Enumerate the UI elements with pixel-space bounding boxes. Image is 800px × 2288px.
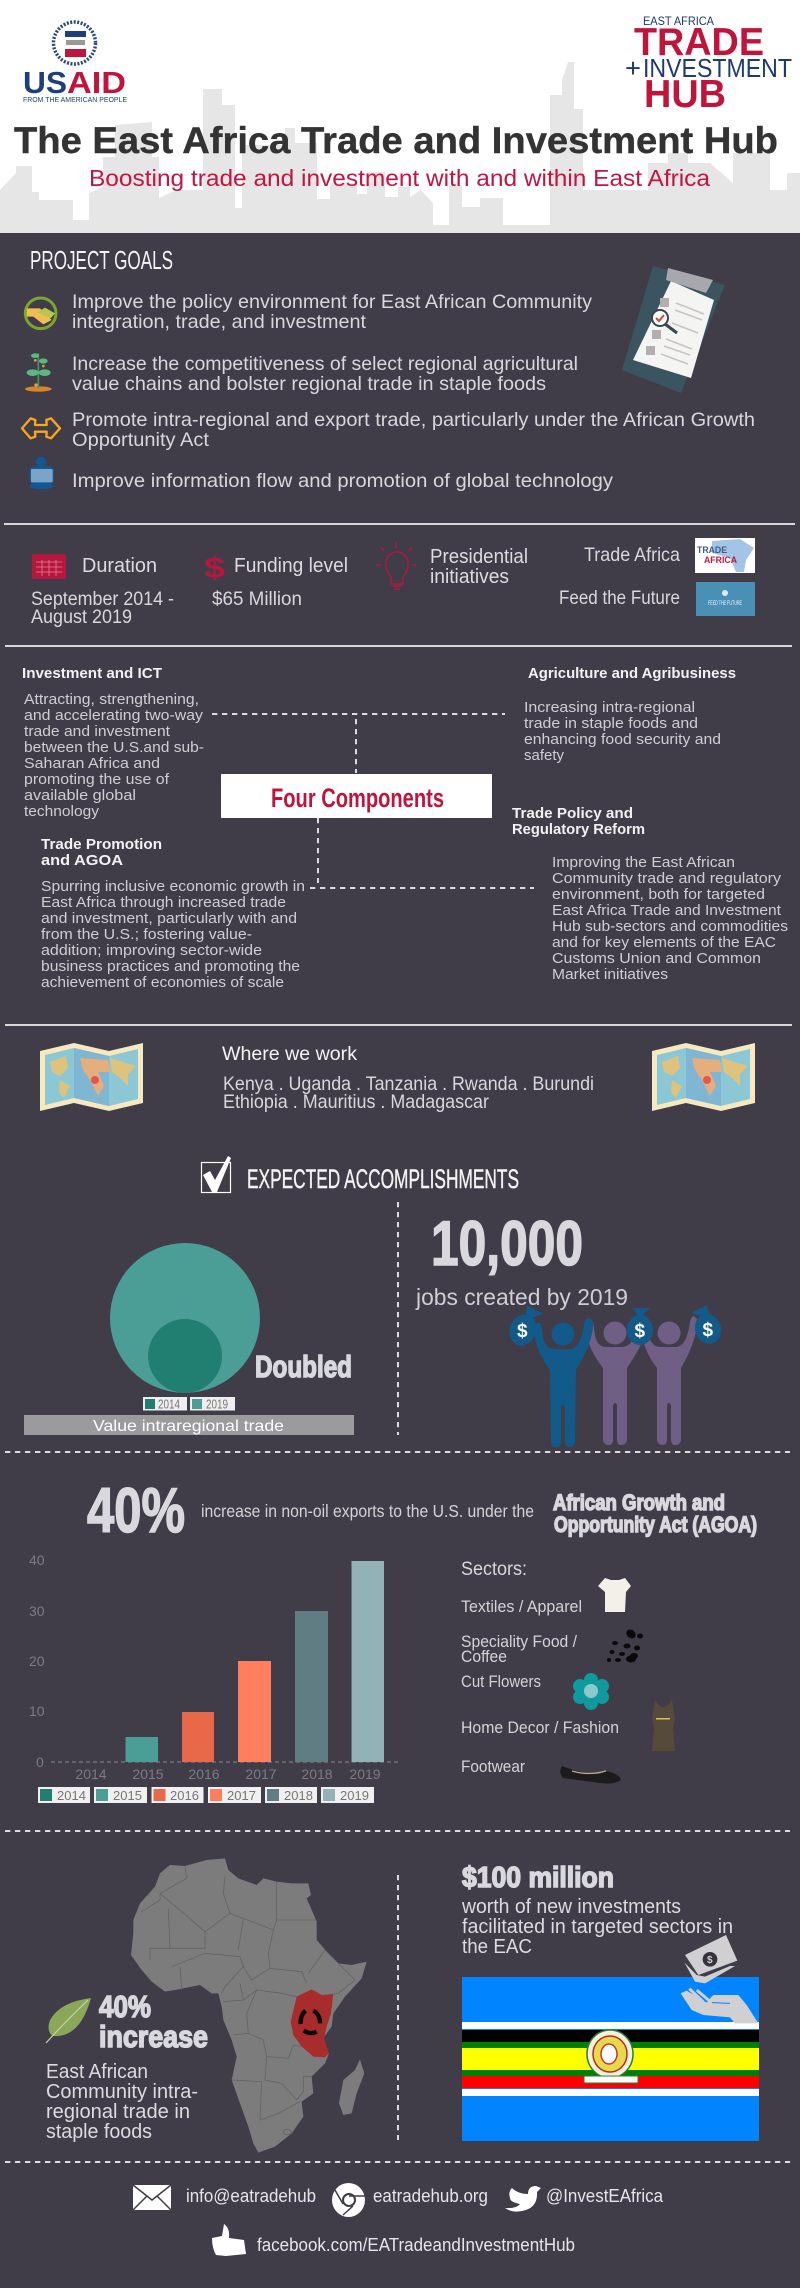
stat: 40% increase staple foods: regional trade in	[46, 2101, 190, 2123]
goal 1 text: Improve the policy environment for East African Community	[72, 291, 592, 313]
panel: duration: September 2014 -	[31, 588, 174, 610]
panel: sectors: Home Decor / Fashion	[461, 1719, 619, 1737]
icon: checkbox	[202, 1156, 231, 1192]
y axis labels: 0	[36, 1754, 44, 1770]
component: agriculture and agribusiness: Agriculture and Agribusiness	[528, 665, 736, 682]
goal 2 text: Increase the competitiveness of select regional agricultural	[72, 353, 578, 375]
money bag left: $	[517, 1321, 528, 1342]
x axis labels: 2016	[188, 1766, 220, 1782]
y axis labels: 40	[29, 1552, 45, 1568]
icon: shoe	[560, 1766, 621, 1784]
panel: duration: Duration	[82, 555, 157, 577]
icon: plant	[25, 353, 52, 392]
panel: sectors: Sectors:	[461, 1558, 527, 1580]
y axis labels: 20	[29, 1653, 45, 1669]
logo: trade africa: TRADE	[697, 545, 727, 555]
logo: USAID: AID	[67, 65, 126, 100]
legend: 2018	[284, 1788, 313, 1803]
legend: 2019	[206, 1396, 228, 1412]
panel: funding level	[204, 552, 348, 610]
component: trade policy and regulatory reform: Regulatory Reform	[512, 821, 645, 838]
circle: 2019	[110, 1243, 260, 1393]
y axis labels	[29, 1552, 45, 1770]
icon: thumbs up	[212, 2224, 246, 2256]
icon: people with money bags	[505, 1305, 725, 1447]
component: trade policy and regulatory reform: Improving the East African	[552, 854, 735, 871]
footer contacts	[133, 2183, 664, 2256]
stat: $100 million: the EAC	[462, 1936, 532, 1958]
legend: 2014	[158, 1396, 180, 1412]
footer contacts: info@eatradehub	[186, 2186, 316, 2206]
footer contacts: @InvestEAfrica	[546, 2186, 664, 2206]
footer contacts: facebook.com/EATradeandInvestmentHub	[257, 2235, 575, 2255]
caption bar	[24, 1415, 354, 1435]
logo: feed the future: FEED THE FUTURE	[708, 601, 742, 607]
logo: feed the future	[696, 582, 755, 616]
icon: map left	[40, 1043, 143, 1111]
component: investment and ICT: and accelerating two-way	[24, 707, 204, 724]
x axis labels: 2014	[75, 1766, 107, 1782]
logo: East Africa Trade + Investment Hub	[625, 14, 792, 116]
panel: sectors: Speciality Food /	[461, 1633, 577, 1651]
component: trade promotion and AGOA: Spurring inclusive economic growth in	[41, 878, 305, 895]
goal 3 text: Promote intra-regional and export trade, particularly under the African Growth	[72, 409, 755, 431]
circle: 2014	[148, 1319, 222, 1393]
panel: trade africa	[584, 538, 755, 573]
icon: leaf	[46, 1998, 91, 2043]
component: trade policy and regulatory reform: Customs Union and Common	[552, 950, 761, 967]
stat: 40% non-oil exports: African Growth and	[553, 1490, 725, 1515]
icon: dollar sign: $	[204, 552, 225, 585]
panel: duration	[31, 554, 174, 628]
panel: trade africa: Trade Africa	[584, 544, 680, 566]
heading: expected accomplishments	[202, 1156, 519, 1194]
goal 4 text: Improve information flow and promotion of global technology	[72, 470, 613, 492]
legend: 2015	[113, 1788, 142, 1803]
component: trade policy and regulatory reform	[512, 805, 788, 983]
component: investment and ICT: Saharan Africa and	[24, 755, 160, 772]
stat: $100 million	[461, 1862, 733, 1958]
footer contacts: eatradehub.org	[373, 2186, 488, 2206]
component: investment and ICT: trade and investment	[24, 723, 171, 740]
stat: 40% increase staple foods: staple foods	[46, 2121, 152, 2143]
money bag right	[691, 1305, 725, 1348]
goal 2 text: value chains and bolster regional trade in staple foods	[72, 373, 546, 395]
icon: light bulb	[376, 542, 416, 589]
logo: trade africa	[695, 538, 755, 573]
subtitle: Boosting trade and investment with and within East Africa	[89, 165, 710, 191]
money bag center	[627, 1308, 653, 1345]
logo: USAID: FROM THE AMERICAN PEOPLE	[23, 97, 127, 104]
flag: East African Community	[462, 1977, 759, 2141]
panel: four components	[22, 665, 788, 991]
bars	[126, 1561, 384, 1762]
icon: coffee beans	[607, 1628, 643, 1662]
x axis labels: 2017	[245, 1766, 277, 1782]
component: trade promotion and AGOA: and investment, particularly with and	[41, 910, 297, 927]
stat: $100 million: worth of new investments	[461, 1896, 681, 1918]
icon: handshake	[25, 298, 56, 329]
legend: 2019	[340, 1788, 369, 1803]
component: trade policy and regulatory reform: Hub sub-sectors and commodities	[552, 918, 788, 935]
panel: project goals	[22, 245, 755, 492]
stat: 40% increase staple foods: 40%	[99, 1989, 151, 2024]
map: Africa with East African Community highlighted	[131, 1858, 367, 2153]
component: trade policy and regulatory reform: Trade Policy and	[512, 805, 633, 822]
person blue	[535, 1318, 593, 1447]
legend	[38, 1787, 374, 1803]
country list	[223, 1073, 594, 1113]
component: trade policy and regulatory reform: Market initiatives	[552, 966, 668, 983]
goal 3 text: Opportunity Act	[72, 429, 210, 451]
panel: funding level: Funding level	[234, 555, 348, 577]
legend: 2017	[227, 1788, 256, 1803]
component: trade promotion and AGOA: achievement of economies of scale	[41, 974, 284, 991]
component: investment and ICT: between the U.S.and sub-	[24, 739, 204, 756]
panel: sectors: Textiles / Apparel	[461, 1598, 582, 1616]
center box: four components	[221, 774, 492, 818]
stat: 10,000 jobs: jobs created by 2019	[415, 1284, 628, 1310]
money bag center: $	[634, 1321, 646, 1342]
panel: presidential initiatives	[376, 542, 528, 589]
stat: 40% non-oil exports: Opportunity Act (AGOA)	[554, 1512, 757, 1537]
component: investment and ICT: technology	[24, 803, 100, 820]
component: trade promotion and AGOA: addition; improving sector-wide	[41, 942, 262, 959]
panel: feed the future	[559, 582, 755, 616]
connector lines	[212, 714, 534, 888]
heading: project goals: PROJECT GOALS	[30, 245, 173, 275]
money bag left	[505, 1305, 543, 1349]
component: agriculture and agribusiness: safety	[524, 747, 564, 764]
component: trade policy and regulatory reform: and for key elements of the EAC	[552, 934, 776, 951]
logo: East Africa Trade + Investment Hub: EAST AFRICA	[643, 14, 714, 28]
icon: person with laptop	[29, 457, 54, 489]
component: trade promotion and AGOA: business practices and promoting the	[41, 958, 300, 975]
stat: 10,000 jobs	[415, 1209, 628, 1310]
x axis labels	[75, 1766, 381, 1782]
component: trade promotion and AGOA: from the U.S.; fostering value-	[41, 926, 252, 943]
panel: presidential initiatives: initiatives	[430, 566, 509, 588]
component: investment and ICT: Attracting, strengthening,	[24, 691, 199, 708]
component: trade promotion and AGOA	[41, 836, 305, 991]
icon: envelope	[133, 2185, 171, 2210]
component: agriculture and agribusiness: enhancing food security and	[524, 731, 721, 748]
component: trade promotion and AGOA: East Africa through increased trade	[41, 894, 286, 911]
component: agriculture and agribusiness: Increasing intra-regional	[524, 699, 695, 716]
component: trade promotion and AGOA: and AGOA	[41, 852, 123, 869]
label: doubled: Doubled	[255, 1349, 352, 1384]
icon: browser	[332, 2183, 365, 2217]
stat: 40% increase staple foods: Community intra-	[46, 2081, 198, 2103]
legend: 2016	[170, 1788, 199, 1803]
component: trade policy and regulatory reform: environment, both for targeted	[552, 886, 765, 903]
person purple center	[587, 1320, 642, 1445]
component: investment and ICT	[22, 665, 204, 820]
panel: feed the future: Feed the Future	[559, 587, 680, 609]
goal 2 text	[72, 353, 578, 395]
component: investment and ICT: Investment and ICT	[22, 665, 162, 682]
logo: East Africa Trade + Investment Hub: TRADE	[634, 21, 764, 64]
panel: duration: August 2019	[31, 606, 132, 628]
icon: trade arrows	[22, 418, 60, 438]
component: agriculture and agribusiness	[524, 665, 736, 764]
panel: where we work: Where we work	[222, 1044, 358, 1065]
panel: sectors: Cut Flowers	[461, 1673, 541, 1691]
component: investment and ICT: promoting the use of	[24, 771, 170, 788]
stat: 10,000 jobs: 10,000	[431, 1209, 583, 1279]
component: trade policy and regulatory reform: East Africa Trade and Investment	[552, 902, 782, 919]
goal 3 text	[72, 409, 755, 451]
title: The East Africa Trade and Investment Hub	[14, 120, 778, 161]
component: investment and ICT: available global	[24, 787, 136, 804]
header panel	[0, 0, 800, 233]
heading: expected accomplishments: EXPECTED ACCOMPLISHMENTS	[247, 1164, 519, 1194]
icon: recycle arrows	[301, 2011, 320, 2033]
logo: USAID	[23, 22, 127, 104]
panel: presidential initiatives: Presidential	[430, 546, 528, 568]
panel: funding level: $65 Million	[212, 588, 302, 610]
icon: bird	[505, 2186, 541, 2212]
stat: 40% increase staple foods: East African	[46, 2061, 148, 2083]
stat: 40% non-oil exports	[87, 1476, 757, 1546]
goal 1 text	[72, 291, 592, 333]
icon: calendar	[32, 554, 66, 579]
component: trade promotion and AGOA: Trade Promotion	[41, 836, 162, 853]
y axis labels: 30	[29, 1603, 45, 1619]
legend: 2014	[57, 1788, 86, 1803]
component: trade policy and regulatory reform: Community trade and regulatory	[552, 870, 782, 887]
icon: hand receiving money	[681, 1935, 758, 2023]
logo: trade africa: AFRICA	[704, 555, 737, 565]
panel: where we work	[40, 1043, 755, 1113]
panel: sectors	[461, 1558, 675, 1784]
legend	[143, 1396, 235, 1412]
x axis labels: 2015	[132, 1766, 164, 1782]
stat: 40% increase staple foods	[46, 1989, 208, 2143]
icon: clipboard	[622, 266, 725, 393]
x axis labels: 2019	[349, 1766, 381, 1782]
goal 1 text: integration, trade, and investment	[72, 311, 367, 333]
stat: $100 million: $100 million	[462, 1862, 614, 1894]
country list: Ethiopia . Mauritius . Madagascar	[223, 1091, 489, 1113]
stat: $100 million: facilitated in targeted sectors in	[462, 1916, 733, 1938]
caption bar: Value intraregional trade	[93, 1418, 284, 1435]
logo: USAID: US	[23, 65, 67, 100]
money bag right: $	[702, 1320, 714, 1341]
country list: Kenya . Uganda . Tanzania . Rwanda . Burundi	[223, 1073, 594, 1095]
y axis labels: 10	[29, 1703, 45, 1719]
icon: USAID seal	[54, 22, 96, 64]
logo: East Africa Trade + Investment Hub: HUB	[644, 73, 726, 116]
stat: 40% non-oil exports: increase in non-oil exports to the U.S. under the	[201, 1501, 534, 1521]
panel: sectors: Footwear	[461, 1758, 525, 1776]
emblem	[584, 2030, 638, 2083]
chart: value intraregional trade	[24, 1243, 354, 1435]
center box: four components: Four Components	[271, 783, 444, 813]
icon: hand receiving money: $	[707, 1955, 713, 1966]
person purple right	[642, 1316, 697, 1445]
stat: 40% non-oil exports: 40%	[87, 1476, 185, 1546]
bar chart: exports by year	[29, 1552, 398, 1803]
x axis labels: 2018	[301, 1766, 333, 1782]
panel: sectors: Coffee	[461, 1648, 507, 1666]
icon: flower	[573, 1673, 609, 1710]
icon: t-shirt	[598, 1578, 631, 1612]
component: agriculture and agribusiness: trade in staple foods and	[524, 715, 698, 732]
stat: 40% increase staple foods: increase	[99, 2019, 208, 2054]
icon: map right	[652, 1043, 755, 1111]
icon: dress	[652, 1700, 675, 1751]
logo: East Africa Trade + Investment Hub: +	[625, 53, 641, 83]
